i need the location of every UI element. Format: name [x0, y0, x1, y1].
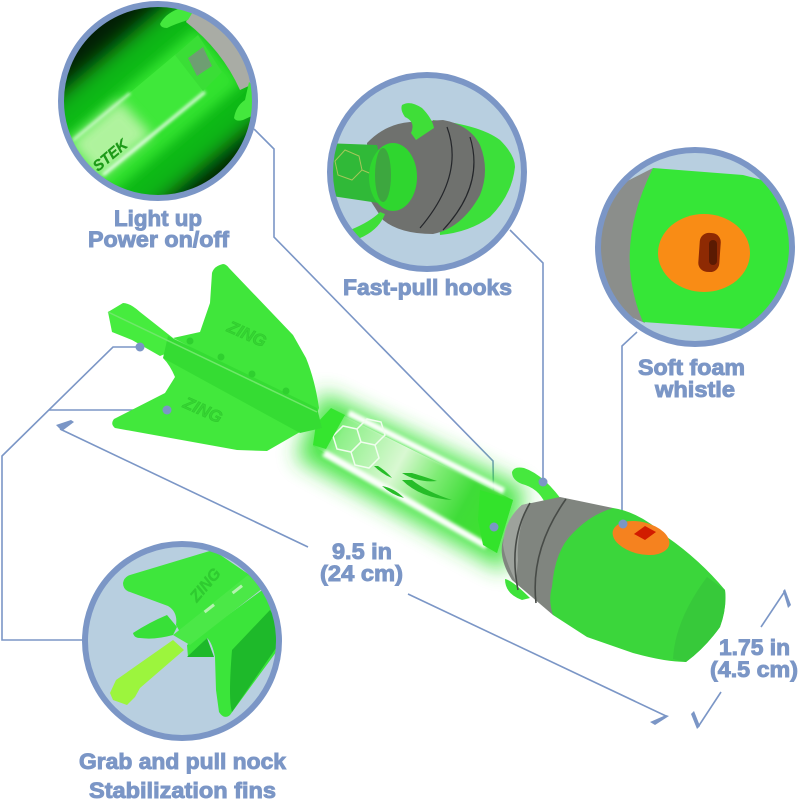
- leader line: grab and pull nock: [2, 347, 140, 640]
- tube: [73, 55, 204, 142]
- label: soft foam whistle: Soft foam: [638, 355, 745, 380]
- fin ZING logos: [179, 317, 269, 427]
- leader dots: [136, 342, 628, 532]
- label: light up power on/off: Power on/off: [88, 227, 230, 252]
- green foam body: [550, 508, 725, 662]
- label: light up power on/off: [88, 206, 230, 252]
- label: soft foam whistle: whistle: [654, 377, 735, 402]
- fin logo: ZING: [186, 565, 225, 606]
- label: diameter: 1.75 in: [719, 635, 790, 660]
- spine highlight: [108, 312, 317, 412]
- label: length: (24 cm): [320, 561, 403, 586]
- foam nose face: [673, 577, 725, 662]
- label: soft foam whistle: [638, 355, 745, 402]
- leader line: fast-pull hooks: [510, 230, 543, 482]
- upper fin: [123, 550, 260, 632]
- label: light up power on/off: Light up: [114, 206, 202, 231]
- lower fin: [187, 590, 276, 717]
- gray foam: [186, 14, 250, 90]
- fin ZING logos: ZING: [223, 317, 269, 351]
- hook upper: [160, 9, 194, 28]
- hook top: [512, 468, 566, 506]
- whistle slot: [698, 232, 721, 273]
- panel: light up circle: [50, 2, 262, 200]
- label: diameter: (4.5 cm): [710, 657, 798, 682]
- leader line: soft foam whistle: [622, 332, 637, 524]
- label: grab and pull nock, stabilization fins: Grab and pull nock: [79, 749, 287, 774]
- panel: soft foam whistle circle: [590, 150, 800, 344]
- tube hex pattern: [335, 150, 374, 180]
- fin shadow: [230, 610, 276, 712]
- hook upper: [401, 103, 434, 140]
- foam end face: [503, 503, 530, 582]
- power switch collar: [175, 35, 222, 91]
- collar: [369, 143, 417, 211]
- nock stick: [110, 640, 184, 705]
- label: grab and pull nock, stabilization fins: [79, 749, 287, 801]
- tail fin front: [112, 358, 322, 451]
- green nose: [433, 120, 515, 235]
- tube logo: STEK: [90, 136, 132, 175]
- diameter dimension arrow: [691, 589, 791, 729]
- tail fin back: [173, 264, 319, 413]
- fin spine: [163, 336, 322, 433]
- orange whistle: [609, 515, 673, 561]
- small fin: [133, 615, 177, 639]
- tube glow: [296, 392, 525, 572]
- length dimension arrow: [56, 420, 669, 725]
- hook bottom: [505, 579, 530, 600]
- panel: grab and pull nock circle: [85, 544, 285, 738]
- rocket toy: [108, 264, 725, 662]
- glow: [50, 40, 240, 200]
- fin ZING logos: ZING: [179, 393, 225, 427]
- gray foam: [367, 120, 485, 234]
- leader line: stabilization fins: [49, 409, 167, 411]
- hook lower: [352, 212, 385, 238]
- spine: [173, 575, 263, 645]
- gray foam edge: [601, 168, 653, 323]
- tube: [333, 144, 378, 203]
- label: diameter: [710, 635, 798, 682]
- hook lower: [234, 82, 252, 121]
- glowing tube with hexagon and flame pattern: [313, 408, 513, 553]
- orange whistle: [658, 214, 750, 292]
- leader line: light up: [254, 129, 494, 527]
- nock: [108, 303, 173, 356]
- label: length: [320, 539, 403, 586]
- spine bumps: [186, 338, 290, 394]
- green foam: [630, 168, 800, 329]
- label: fast-pull hooks: Fast-pull hooks: [343, 275, 512, 300]
- whistle slot: [634, 526, 656, 540]
- label: length: 9.5 in: [332, 539, 392, 564]
- panel: fast-pull hooks circle: [325, 75, 524, 269]
- gray foam rings: [502, 497, 613, 615]
